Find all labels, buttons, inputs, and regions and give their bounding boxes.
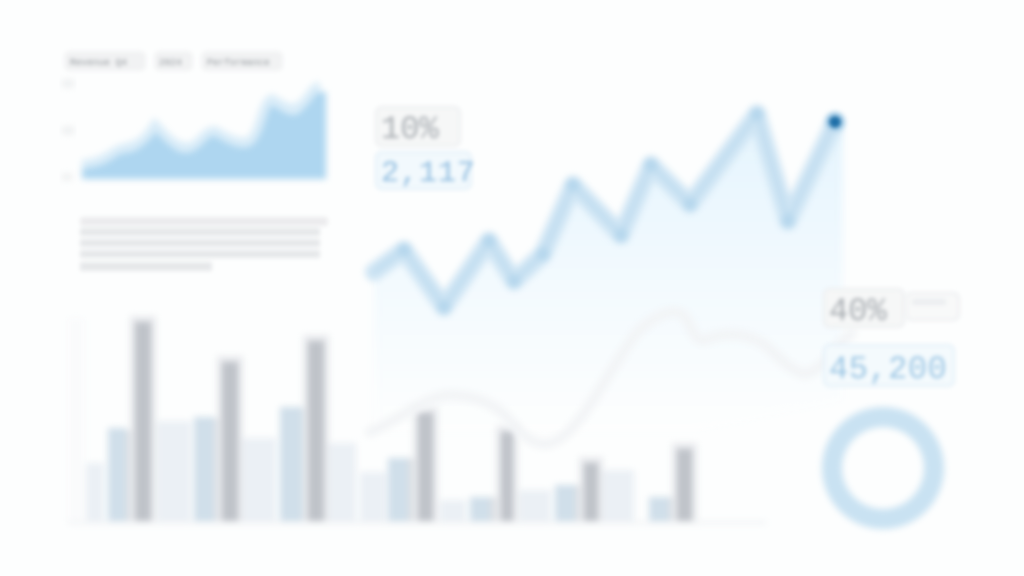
- main chart area fill: [374, 114, 843, 430]
- stat: 40%: 40%: [829, 293, 887, 330]
- filter pills: Revenue Q4: [70, 57, 127, 68]
- small stat label pill: [906, 293, 959, 320]
- trend line: gray: [370, 312, 852, 444]
- stat: 2,117: 2,117: [381, 157, 476, 191]
- stat: 10%: 10%: [381, 111, 439, 148]
- filter pills: [64, 51, 283, 71]
- bar chart: [68, 316, 766, 524]
- filter pills: 2024: [159, 57, 182, 68]
- small area chart: [82, 86, 326, 179]
- paragraph text block: [80, 217, 328, 271]
- stat: 40%: [824, 289, 904, 330]
- filter pills: Performance: [207, 57, 270, 68]
- small chart axis labels: [62, 80, 74, 180]
- stat: 45,200: 45,200: [829, 351, 947, 388]
- donut chart: [832, 417, 934, 519]
- trend line: main blue: [374, 107, 835, 314]
- stat: 10%: [376, 107, 460, 148]
- end marker dot: [825, 112, 845, 132]
